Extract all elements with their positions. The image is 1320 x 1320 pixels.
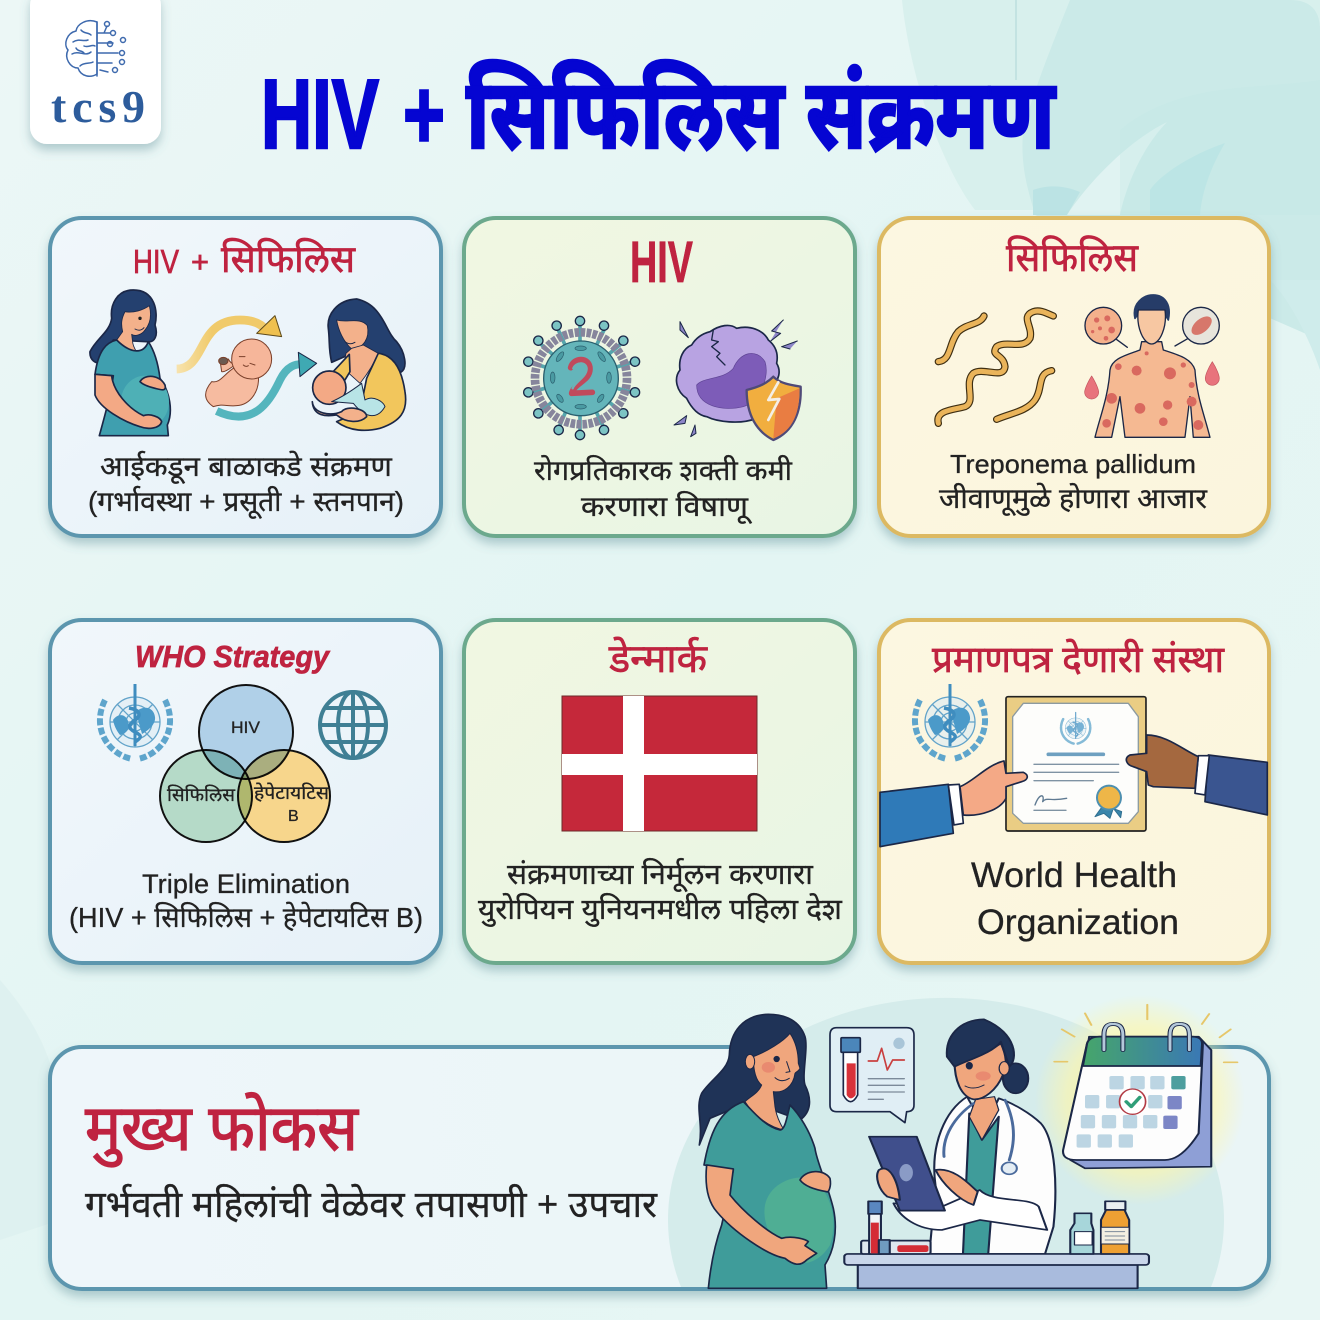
heading: मुख्य फोकस [85, 1092, 360, 1167]
title: सिफिलिस [466, 59, 785, 169]
illustration: certificate handover [880, 697, 1267, 847]
illustration: pregnant woman and result bubble [699, 1014, 914, 1288]
chart: venn diagram: सिफिलिस [167, 785, 236, 805]
body text [971, 856, 1179, 942]
title: HIV [261, 59, 379, 169]
icon: man with rash [1085, 295, 1219, 437]
icon: pregnant woman [90, 290, 170, 436]
icon: drops [1085, 362, 1219, 399]
icon: skin detail left [1085, 307, 1127, 347]
body text [88, 450, 404, 519]
icon: breastfeeding mother [312, 299, 406, 430]
illustration: clinic scene [844, 1005, 1237, 1288]
panel: WHO strategy [50, 620, 441, 963]
title [261, 59, 1057, 169]
illustration: transmission scene [90, 290, 406, 436]
panel: main focus [50, 995, 1269, 1289]
arrow: yellow transmission [177, 316, 282, 369]
arrow: teal transmission [217, 352, 317, 417]
body text: संक्रमणाच्या निर्मूलन करणारा [507, 858, 813, 892]
chart: venn diagram: हेपेटायटिस [254, 782, 330, 803]
chart: venn diagram: HIV [231, 718, 261, 737]
heading: सिफिलिस [221, 237, 356, 281]
body text: (गर्भावस्था + प्रसूती + स्तनपान) [88, 485, 404, 519]
body text: (HIV + सिफिलिस + हेपेटायटिस B) [69, 901, 423, 933]
icon: spirochete bacteria [938, 311, 1053, 423]
card bottom edge over circle [681, 1287, 1211, 1291]
heading [133, 237, 356, 281]
logo badge [30, 0, 161, 144]
heading: प्रमाणपत्र देणारी संस्था [932, 639, 1225, 680]
body text [939, 449, 1208, 516]
icon: WHO emblem [100, 684, 170, 759]
panel: certifying organisation [879, 620, 1269, 963]
panel: Denmark [464, 620, 855, 963]
logo wordmark: tcs9 [51, 81, 145, 132]
heading: + [191, 246, 209, 279]
chart: venn diagram [160, 685, 330, 842]
heading: डेन्मार्क [608, 637, 708, 681]
icon: globe [320, 692, 386, 758]
body text: युरोपियन युनियनमधील पहिला देश [478, 893, 843, 927]
icon: right hand with sleeve [1126, 735, 1267, 815]
body text: Triple Elimination [142, 869, 350, 899]
icon: skin detail right [1175, 307, 1219, 346]
body text [478, 858, 843, 927]
illustration: virus and cell [524, 316, 801, 440]
body text: Treponema pallidum [950, 449, 1196, 479]
body text: करणारा विषाणू [581, 490, 752, 524]
decorative circle behind scene [668, 998, 1224, 1287]
icon: Denmark flag [562, 696, 757, 831]
illustration: test result bubble [830, 1028, 914, 1123]
illustration: exam table with supplies [844, 1201, 1149, 1288]
icon: circuit brain [66, 21, 126, 76]
panel: syphilis [879, 218, 1269, 536]
icon: left hand with sleeve [880, 761, 1027, 847]
heading: सिफिलिस [1006, 236, 1139, 280]
heading: HIV [133, 243, 179, 280]
body text [534, 454, 793, 524]
heading: WHO Strategy [135, 639, 331, 674]
body text [69, 869, 423, 933]
title: + [403, 59, 445, 169]
illustration: calendar [1054, 1005, 1237, 1168]
icon: calendar glow [1035, 995, 1245, 1205]
body text: आईकडून बाळाकडे संक्रमण [100, 450, 393, 484]
icon: certificate [1006, 697, 1146, 831]
illustration: pregnant woman [699, 1014, 835, 1288]
panel: HIV [464, 218, 855, 536]
chart: venn diagram: B [288, 808, 299, 825]
icon: baby [206, 339, 272, 407]
body text: जीवाणूमुळे होणारा आजार [939, 482, 1208, 516]
illustration: doctor [869, 1019, 1055, 1254]
icon: HIV virus [524, 316, 640, 440]
heading: HIV [630, 230, 693, 295]
icon: WHO emblem [915, 684, 985, 759]
title: संक्रमण [806, 59, 1057, 169]
body text: World Health [971, 856, 1177, 895]
body text: गर्भवती महिलांची वेळेवर तपासणी + उपचार [85, 1183, 658, 1225]
body text: रोगप्रतिकारक शक्ती कमी [534, 454, 793, 486]
panel: HIV + syphilis transmission [50, 218, 441, 536]
body text: Organization [977, 903, 1179, 942]
illustration: bacteria and rash [938, 295, 1219, 437]
icon: damaged immune cell with shield [674, 320, 801, 440]
